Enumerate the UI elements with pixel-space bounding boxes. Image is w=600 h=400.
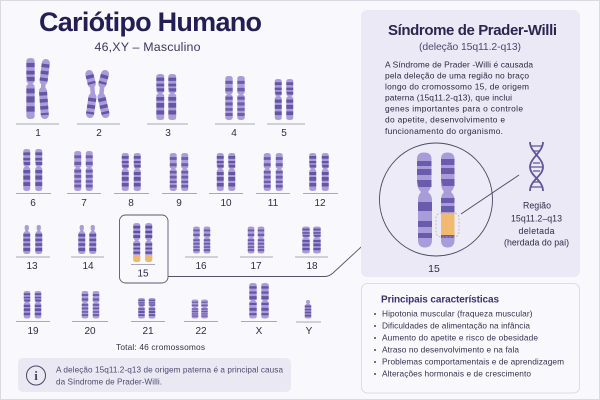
characteristics list: Aumento do apetite e risco de obesidade <box>382 332 538 342</box>
chromosome pair 21 <box>131 298 165 337</box>
title: Cariótipo Humano <box>39 7 262 37</box>
chromosome pair 7 <box>67 151 101 209</box>
callout text: A deleção 15q11.2-q13 de origem paterna é a principal causa <box>56 366 283 374</box>
icon: info <box>26 366 46 385</box>
panel: main characteristics <box>362 284 580 393</box>
chromosome pair 2: 2 <box>96 128 102 139</box>
panel: Prader-Willi syndrome <box>361 10 580 277</box>
chromosome pair 16: 16 <box>195 261 207 272</box>
chromosome pair 11: 11 <box>268 198 279 209</box>
connector from chromosome 15 to zoomed view <box>168 224 386 276</box>
chromosome Y: Y <box>306 326 313 337</box>
chromosome pair 16 <box>185 226 218 272</box>
chromosome pair X <box>241 283 277 337</box>
panel description: genes importantes para o controle <box>385 104 523 114</box>
zoom circle <box>380 143 492 256</box>
chromosome pair 4: 4 <box>231 128 237 139</box>
chromosome pair 1 <box>16 58 59 139</box>
total count: Total: 46 cromossomos <box>116 342 205 352</box>
chromosome pair 5 <box>267 79 305 139</box>
chromosome pair 3 <box>147 74 188 139</box>
callout text <box>56 366 283 386</box>
pointer line <box>461 175 519 214</box>
chromosome 15 with deletion <box>436 152 459 248</box>
panel heading: Síndrome de Prader-Willi <box>388 22 557 39</box>
panel description: longo do cromossomo 15, de origem <box>385 82 529 92</box>
chromosome pair 7: 7 <box>81 198 87 209</box>
chromosome pair 4 <box>215 76 255 139</box>
chromosome pair 9 <box>162 153 197 209</box>
chromosome pair 6: 6 <box>30 198 36 209</box>
panel description: pela deleção de uma região no braço <box>385 70 529 80</box>
icon: DNA helix <box>530 142 543 191</box>
chromosome label: 15 <box>428 263 440 275</box>
chromosome pair 20 <box>72 291 108 337</box>
chromosome pair 21: 21 <box>142 326 154 337</box>
chromosome pair 12: 12 <box>314 198 326 209</box>
panel subheading: (deleção 15q11.2-q13) <box>419 42 521 53</box>
chromosome pair 12 <box>303 153 338 209</box>
chromosome pair X: X <box>256 326 263 337</box>
chromosome pair 13 <box>16 225 50 272</box>
chromosome pair 18 <box>295 226 328 272</box>
deleted region label: Região <box>523 200 551 210</box>
chromosome 15 normal <box>417 152 432 248</box>
chromosome pair 6 <box>16 149 51 209</box>
chromosome pair 14 <box>71 225 104 272</box>
info callout <box>18 358 291 392</box>
chromosome pair 13: 13 <box>26 261 38 272</box>
panel description: paterna (15q11.2-q13), que inclui <box>385 92 512 102</box>
chromosome pair 1: 1 <box>35 128 41 139</box>
chromosome pair 22: 22 <box>195 326 207 337</box>
characteristics list <box>374 308 564 378</box>
chromosome pair 11 <box>256 153 290 209</box>
chromosome pair 19: 19 <box>27 326 39 337</box>
chromosome pair 9: 9 <box>176 198 182 209</box>
panel description: funcionamento do organismo. <box>385 126 503 136</box>
icon: info: i <box>34 368 38 383</box>
chromosome Y <box>296 300 321 337</box>
characteristics list: Hipotonia muscular (fraqueza muscular) <box>382 308 533 318</box>
chromosome pair 8: 8 <box>128 198 134 209</box>
deleted region label <box>504 200 569 248</box>
characteristics list: Dificuldades de alimentação na infância <box>382 320 530 330</box>
deleted region label: 15q11.2–q13 <box>511 214 562 224</box>
subtitle: 46,XY – Masculino <box>94 40 201 54</box>
chromosome pair 3: 3 <box>165 128 171 139</box>
characteristics heading: Principais características <box>381 294 499 306</box>
chromosome pair 22 <box>184 300 218 337</box>
chromosome pair 14: 14 <box>82 261 94 272</box>
chromosome pair 15 highlighted: 15 <box>137 268 149 280</box>
panel description <box>385 60 533 136</box>
characteristics list: Alterações hormonais e de crescimento <box>382 368 531 378</box>
chromosome pair 19 <box>16 291 50 337</box>
chromosome pair 18: 18 <box>306 261 318 272</box>
deleted region label: (herdada do pai) <box>504 238 569 248</box>
characteristics list: Problemas comportamentais e de aprendizagem <box>382 356 564 366</box>
chromosome pair 5: 5 <box>281 128 287 139</box>
callout text: da Síndrome de Prader-Willi. <box>56 378 162 386</box>
characteristics list: Atraso no desenvolvimento e na fala <box>382 344 519 354</box>
chromosome pair 8 <box>114 153 149 209</box>
chromosome pair 15 highlighted <box>120 215 168 283</box>
chromosome pair 17: 17 <box>250 261 262 272</box>
chromosome pair 10 <box>209 153 243 209</box>
chromosome pair 2 <box>77 74 120 139</box>
deleted region label: deletada <box>518 226 555 236</box>
chromosome pair 10: 10 <box>220 198 232 209</box>
panel description: A Síndrome de Prader -Willi é causada <box>385 60 533 70</box>
chromosome pair 17 <box>240 226 273 272</box>
deleted region outline <box>436 213 459 237</box>
chromosome pair 20: 20 <box>84 326 96 337</box>
panel description: do apetite, desenvolvimento e <box>385 114 505 124</box>
